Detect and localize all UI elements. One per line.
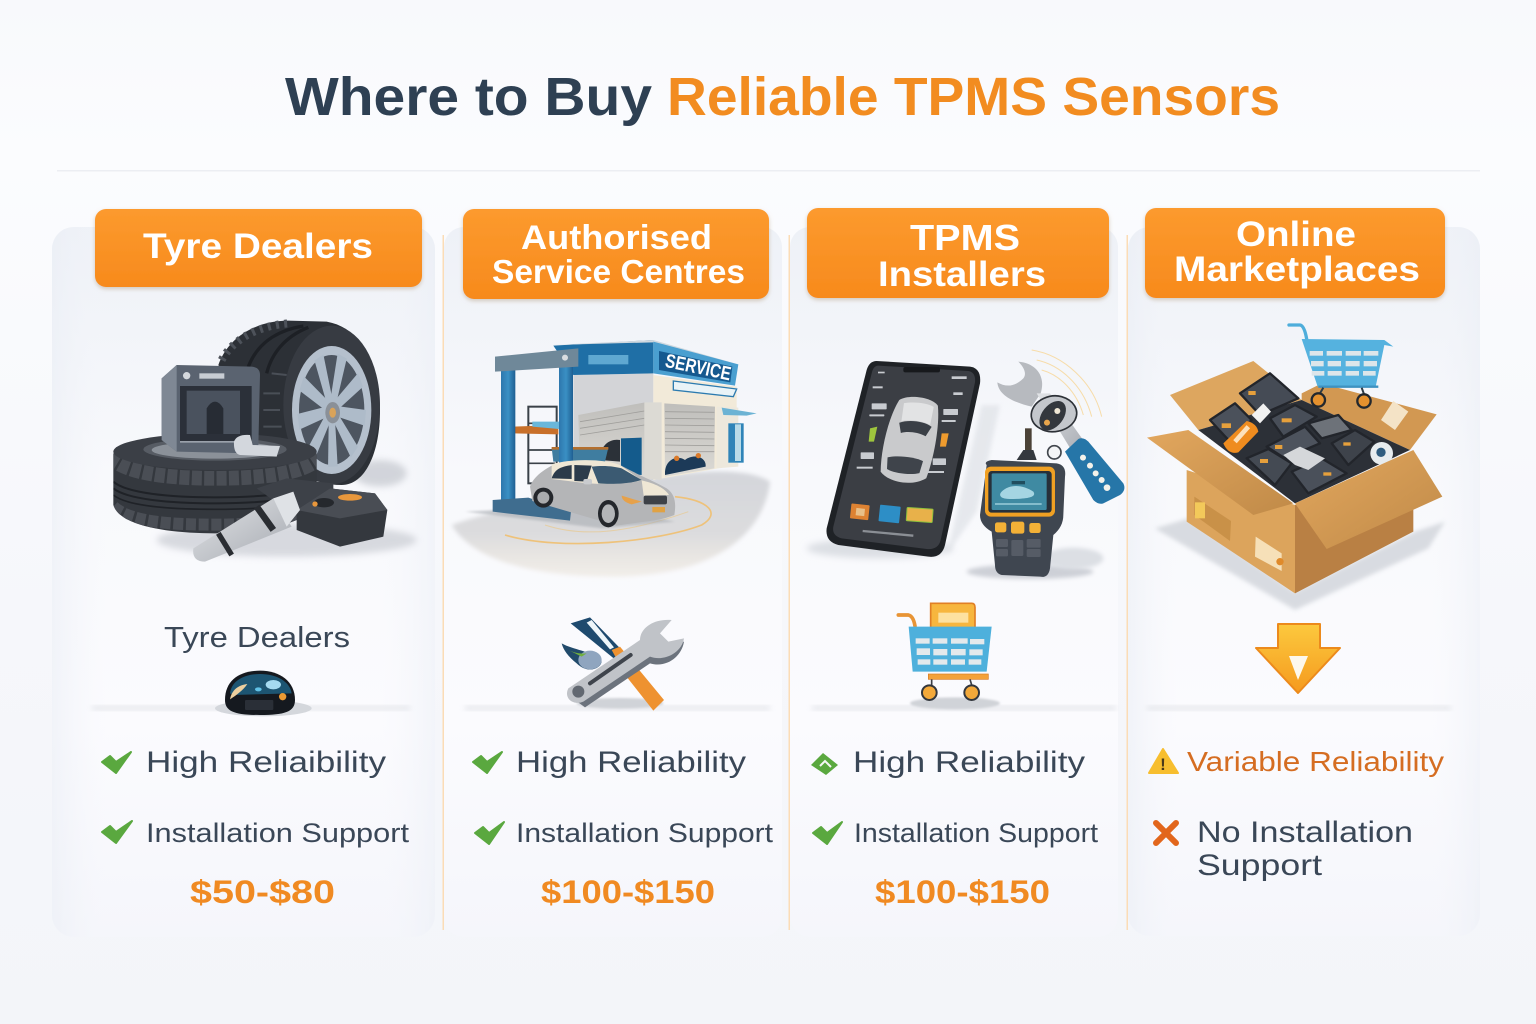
icon: crossed wrench and hammer (562, 617, 684, 711)
row: no installation support (1156, 816, 1413, 882)
row: installation support: Installation Support (146, 818, 410, 848)
row: installation support: Installation Support (854, 818, 1099, 848)
row: installation support: Installation Support (516, 818, 774, 848)
illustration: service centre with car on lift (452, 340, 770, 577)
illustration: service centre with car on lift: SERVICE (663, 351, 733, 385)
header: online marketplaces: Marketplaces (1174, 250, 1420, 289)
floor line (465, 706, 770, 710)
header: tyre dealers: Tyre Dealers (143, 227, 373, 266)
header: tyre dealers (95, 209, 422, 287)
floor line (92, 706, 410, 710)
row: high reliability: High Reliability (516, 746, 746, 779)
title: Reliable TPMS Sensors (667, 67, 1280, 127)
illustration: open box of sensors and cart (1147, 325, 1445, 610)
header: authorised service centres: Service Centres (492, 253, 745, 290)
row: no installation support: No Installation (1197, 816, 1413, 849)
row: high reliability: High Reliability (853, 746, 1085, 779)
header: authorised service centres: Authorised (521, 219, 712, 257)
icon: shopping cart with package (898, 603, 1000, 709)
header: TPMS installers: TPMS (910, 217, 1020, 258)
floor line (1147, 706, 1451, 710)
header: TPMS installers (807, 208, 1109, 298)
icon: down arrow (1256, 624, 1340, 693)
floor line (812, 706, 1116, 710)
row: high reliability: High Reliaibility (146, 746, 386, 779)
row: variable reliability: ! (1160, 755, 1166, 774)
panel: TPMS installers (790, 208, 1124, 937)
price: $100-$150 (541, 874, 715, 910)
header: authorised service centres (463, 209, 769, 299)
panel: authorised service centres (444, 209, 782, 937)
row: variable reliability: Variable Reliability (1187, 746, 1444, 777)
subheading: tyre dealers: Tyre Dealers (164, 622, 350, 654)
price: $100-$150 (875, 874, 1050, 910)
header: TPMS installers: Installers (878, 255, 1046, 294)
panel: tyre dealers (52, 209, 435, 937)
title (285, 67, 1280, 127)
icon: TPMS sensor puck (215, 671, 312, 716)
panel: online marketplaces (1128, 208, 1480, 936)
illustration: tyres, TPMS tool and sensor (110, 321, 417, 562)
price: $50-$80 (190, 874, 335, 910)
row: no installation support: Support (1197, 849, 1323, 882)
illustration: phone app, OBD scanner and wrench (807, 350, 1124, 579)
header: online marketplaces: Online (1236, 215, 1356, 254)
title: Where to Buy (285, 67, 652, 127)
header: online marketplaces (1145, 208, 1445, 298)
